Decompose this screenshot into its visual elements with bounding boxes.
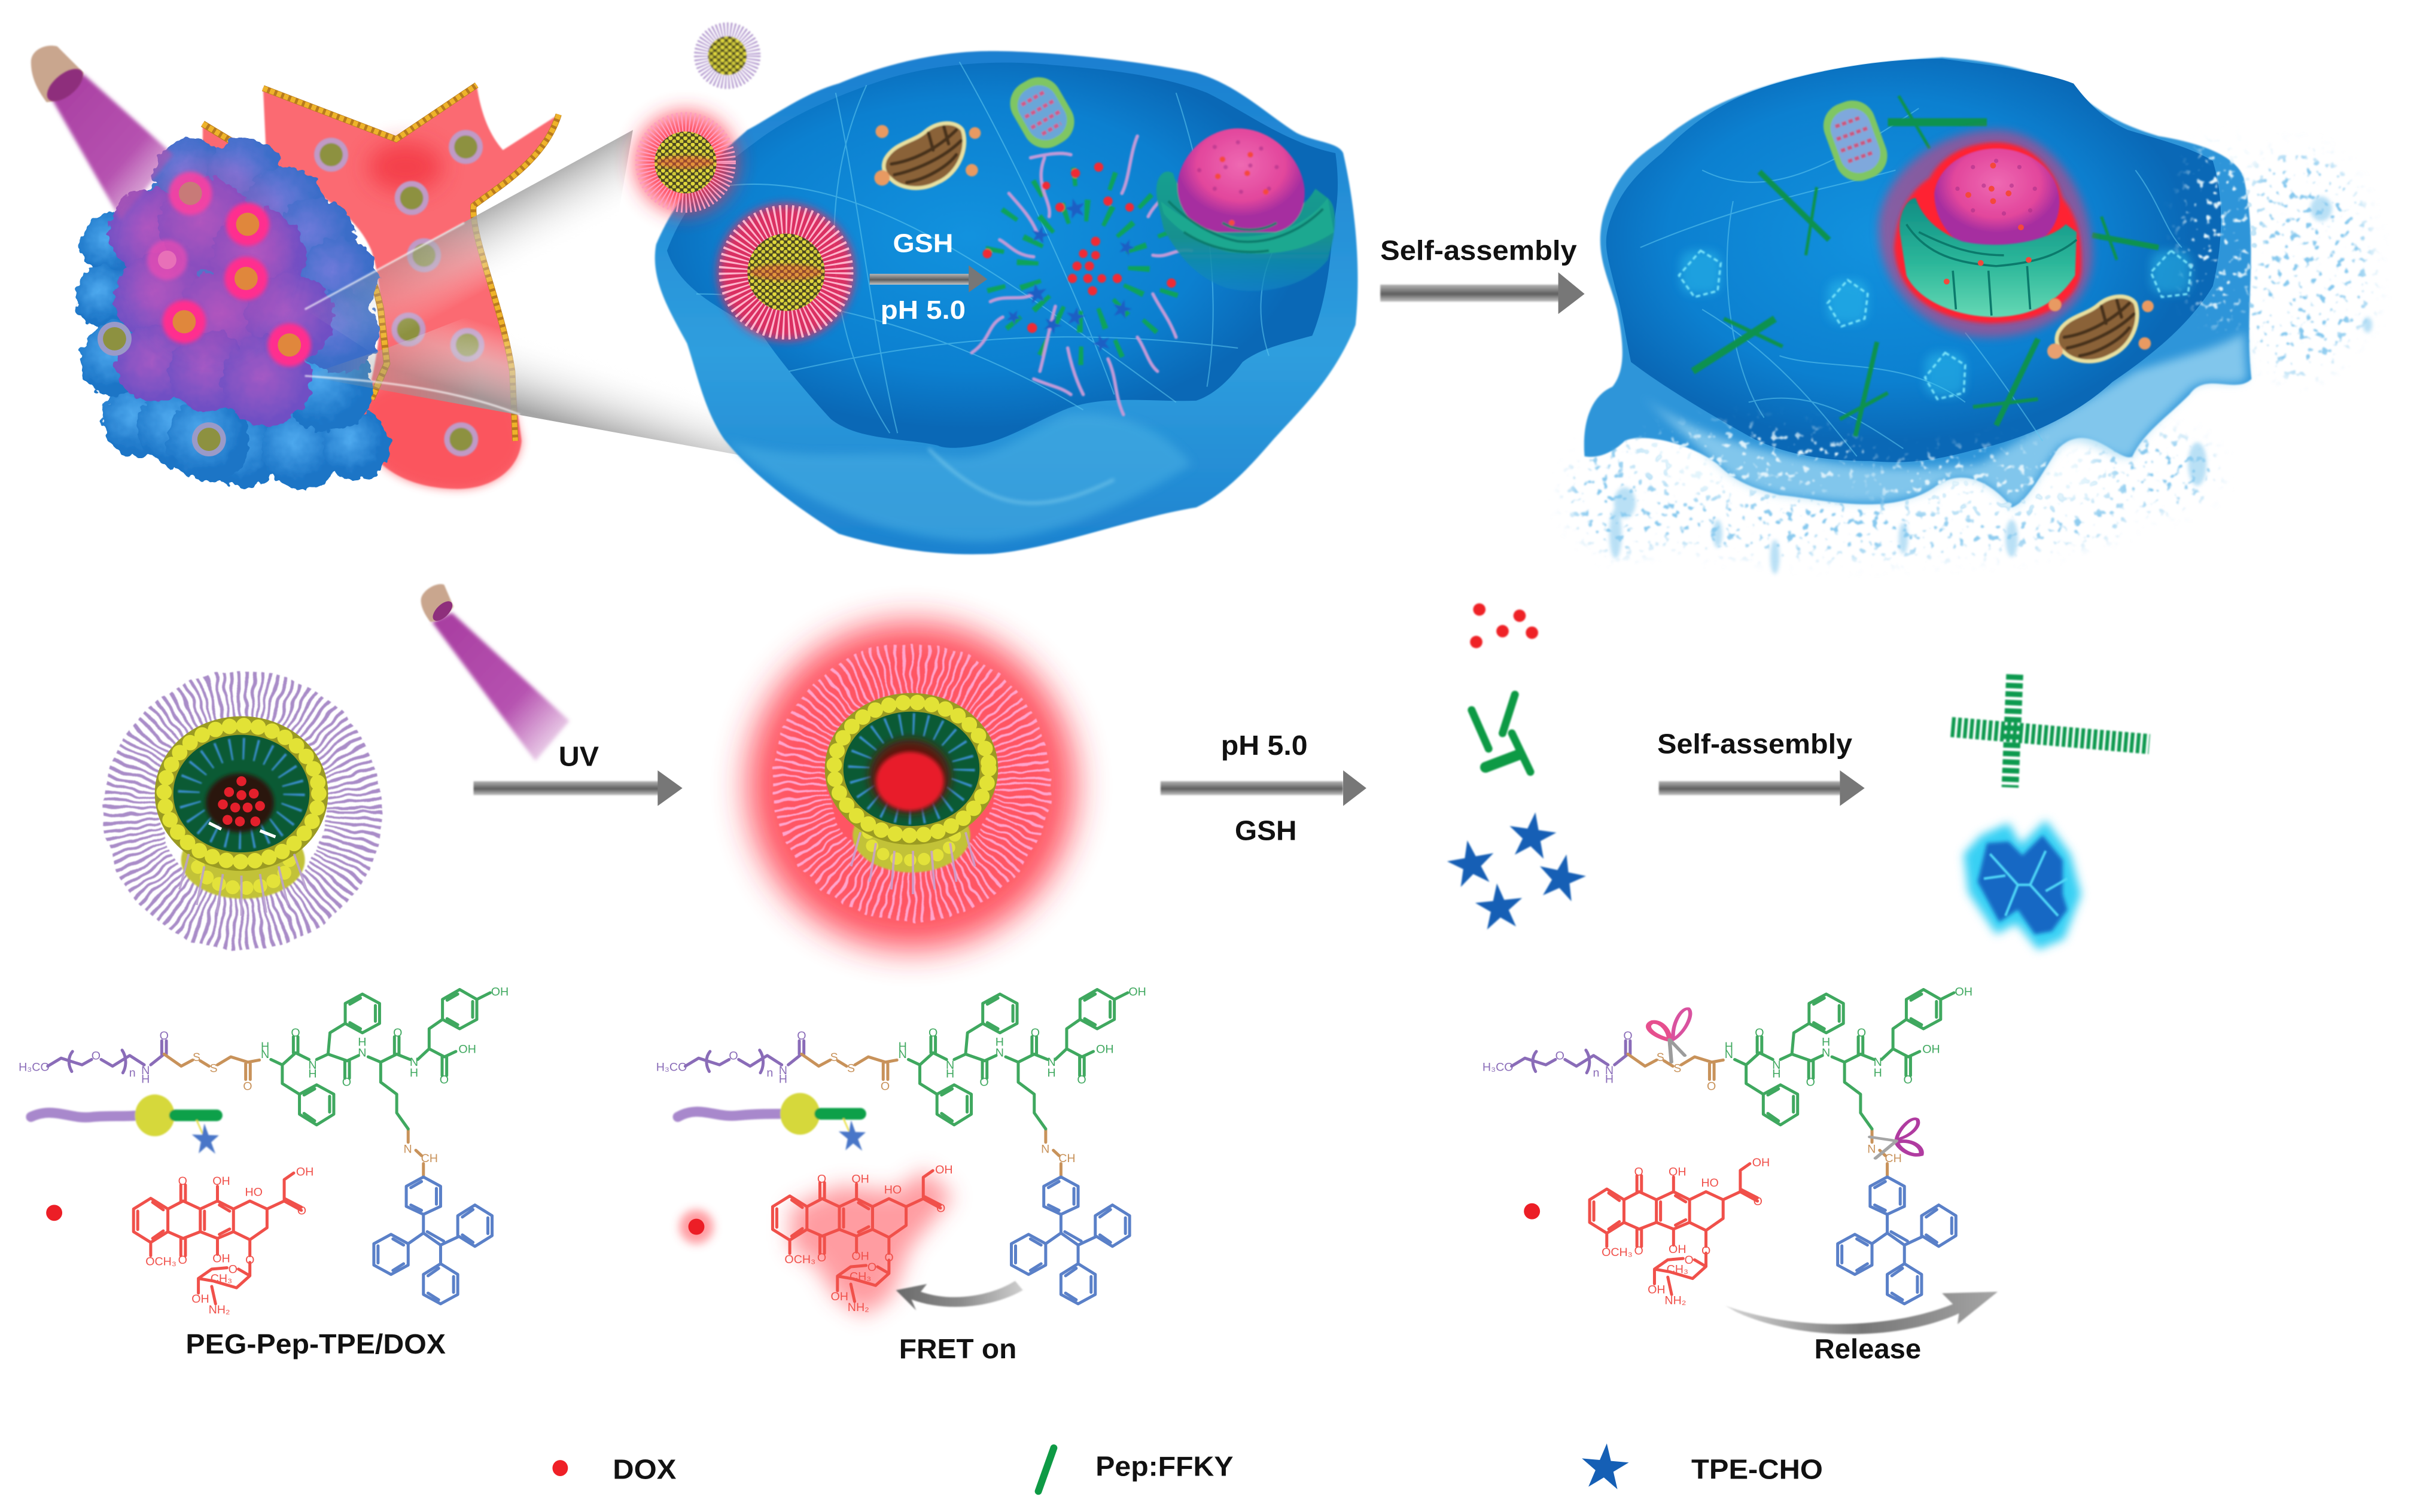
upper molecule: O	[1555, 1050, 1564, 1063]
upper molecule: H	[996, 1035, 1004, 1048]
upper molecule: H	[1725, 1040, 1733, 1053]
DOX segment	[1590, 1156, 1770, 1307]
arrow: lower self-assembly	[1657, 728, 1865, 806]
red glow, ER and nucleus	[1879, 130, 2092, 337]
DOX segment: O	[229, 1263, 238, 1276]
DOX segment: CH₃	[211, 1272, 232, 1285]
DOX segment: NH₂	[209, 1303, 230, 1316]
upper molecule: O	[979, 1076, 989, 1089]
DOX segment: OCH₃	[1602, 1246, 1633, 1259]
arrow: UV: UV	[559, 740, 599, 772]
arrow: top self-assembly: Self-assembly	[1380, 235, 1577, 266]
peptide segment: OH	[458, 1042, 476, 1056]
DOX segment: O	[1701, 1245, 1710, 1258]
peptide segment: H	[308, 1067, 317, 1080]
released peptide rods	[1472, 694, 1530, 772]
upper molecule: O	[1707, 1080, 1716, 1093]
arrow: top self-assembly	[1380, 235, 1585, 314]
upper molecule: H	[899, 1040, 907, 1053]
peptide segment: N	[410, 1056, 418, 1069]
upper molecule: H	[1874, 1066, 1882, 1080]
organelle: mitochondrion	[1817, 94, 1894, 188]
upper molecule: S	[847, 1062, 855, 1075]
upper molecule: S	[1657, 1051, 1664, 1064]
upper molecule: H₃CO	[656, 1061, 687, 1074]
upper molecule: H	[946, 1067, 954, 1080]
DOX with red glow: OH	[830, 1290, 848, 1303]
arrow: UV	[474, 740, 683, 806]
upper molecule: N	[1725, 1048, 1733, 1061]
GSH pH arrow	[870, 229, 987, 325]
DOX with red glow: O	[817, 1251, 826, 1264]
legend: TPE-CHO: TPE-CHO	[1691, 1454, 1823, 1485]
organelle: ER and nucleus	[1156, 129, 1335, 291]
PEG segment: N	[141, 1064, 150, 1077]
DOX segment: OH	[1669, 1166, 1687, 1179]
DOX with red glow: OH	[935, 1163, 953, 1176]
peptide segment	[261, 985, 509, 1129]
blue glowing aggregates	[1679, 251, 2191, 399]
DOX segment: O	[1754, 1195, 1762, 1208]
upper molecule: N	[1041, 1143, 1049, 1156]
icon: scissors on imine	[1870, 1119, 1922, 1159]
curved arrow: Release	[1725, 1292, 1998, 1334]
DOX with red glow: OCH₃	[784, 1253, 815, 1266]
panel: tumour	[31, 45, 390, 489]
peptide segment: N	[358, 1047, 366, 1060]
DOX with red glow: O	[936, 1202, 945, 1215]
upper molecule: OH	[1922, 1042, 1940, 1056]
upper molecule	[1483, 985, 1972, 1304]
peptide segment: OH	[491, 985, 509, 998]
legend: TPE-CHO	[1579, 1441, 1823, 1490]
upper molecule: O	[1031, 1026, 1040, 1040]
disulfide linker: S	[209, 1062, 218, 1075]
disulfide linker: S	[193, 1051, 200, 1064]
DOX segment: O	[178, 1254, 187, 1267]
upper molecule: CH	[1058, 1152, 1076, 1165]
disulfide linker: O	[243, 1080, 252, 1093]
nanoparticles in vessel	[314, 130, 485, 456]
structure: Release	[1483, 985, 1998, 1364]
structure: FRET on	[656, 985, 1146, 1364]
DOX with red glow: OH	[851, 1250, 869, 1263]
DOX with red glow: O	[817, 1172, 826, 1185]
GSH pH arrow: GSH	[893, 229, 953, 258]
peptide segment: N	[261, 1048, 269, 1061]
DOX segment: O	[245, 1254, 254, 1267]
DOX with red glow: HO	[884, 1183, 902, 1196]
curved arrow: FRET	[896, 1281, 1023, 1310]
upper molecule: S	[1673, 1062, 1681, 1075]
released TPE stars	[1444, 809, 1590, 931]
legend: Pep:FFKY: Pep:FFKY	[1095, 1450, 1233, 1481]
DOX segment: OH	[1669, 1243, 1687, 1256]
peptide segment: O	[291, 1026, 300, 1040]
disulfide linker	[164, 1051, 438, 1176]
green fibres	[1693, 96, 2159, 436]
DOX dot with glow	[680, 1210, 713, 1244]
DOX dot	[46, 1205, 62, 1221]
DOX dot	[1524, 1203, 1540, 1220]
upper molecule: OH	[1955, 985, 1972, 998]
disulfide linker: CH	[421, 1152, 438, 1165]
upper molecule: OH	[1096, 1042, 1114, 1056]
upper molecule: N	[1605, 1064, 1614, 1077]
upper molecule: N	[1874, 1056, 1882, 1069]
label: FRET on: FRET on	[899, 1333, 1016, 1364]
PEG segment: H₃CO	[19, 1061, 50, 1074]
DOX segment: O	[1634, 1245, 1643, 1258]
disulfide linker: N	[404, 1143, 412, 1156]
DOX segment: OH	[212, 1175, 230, 1188]
DOX with red glow: NH₂	[848, 1301, 869, 1314]
upper molecule: H	[1822, 1035, 1830, 1048]
legend	[552, 1441, 1823, 1491]
splash over cell wall	[1625, 139, 2258, 517]
upper molecule: OH	[1128, 985, 1146, 998]
peptide segment: N	[308, 1059, 317, 1072]
PEG segment: O	[160, 1029, 169, 1042]
particle: inside cell	[718, 204, 854, 340]
panel: cell with nanoparticle disassembly	[636, 29, 1357, 554]
schematic monomer	[678, 1093, 871, 1156]
upper molecule: H₃CO	[1483, 1061, 1514, 1074]
label: PEG-Pep-TPE/DOX: PEG-Pep-TPE/DOX	[185, 1328, 446, 1359]
legend: DOX	[552, 1454, 676, 1485]
light source: lamp	[31, 45, 173, 220]
micelle 1	[132, 699, 354, 922]
DOX with red glow: CH₃	[850, 1270, 871, 1283]
upper molecule: O	[1857, 1026, 1866, 1040]
DOX segment: O	[1634, 1166, 1643, 1179]
TPE segment	[374, 1177, 492, 1304]
legend: DOX: DOX	[613, 1454, 676, 1485]
upper molecule: O	[797, 1029, 806, 1042]
zoom cones from tumour to cell	[305, 130, 755, 458]
upper molecule: N	[1772, 1059, 1780, 1072]
panel: blood vessel	[203, 85, 559, 489]
upper molecule: N	[946, 1059, 954, 1072]
DOX segment: OH	[1752, 1156, 1770, 1169]
burst of released components	[972, 136, 1196, 414]
blue glowing aggregate	[1964, 820, 2081, 950]
striped fibre cross	[1952, 675, 2150, 788]
DOX segment: O	[297, 1204, 306, 1217]
PEG segment: O	[92, 1050, 101, 1063]
DOX segment: CH₃	[1667, 1263, 1688, 1276]
DOX with red glow	[772, 1163, 953, 1316]
particle: purple PEG-shielded	[701, 29, 754, 82]
peptide segment: H	[358, 1035, 366, 1048]
upper molecule: O	[729, 1050, 738, 1063]
splash specks	[1569, 151, 2371, 556]
DOX with red glow: OH	[851, 1172, 869, 1185]
structure: PEG-Pep-TPE/DOX	[19, 985, 509, 1359]
upper molecule: n	[1593, 1066, 1599, 1080]
DOX segment: OH	[212, 1252, 230, 1266]
DOX segment: HO	[245, 1185, 263, 1199]
DOX with red glow: O	[867, 1261, 876, 1274]
glowing particles on tumour	[98, 172, 311, 456]
organelle: golgi	[2047, 297, 2154, 361]
upper molecule: N	[1822, 1047, 1830, 1060]
DOX segment: OH	[191, 1292, 209, 1306]
peptide segment: H	[410, 1066, 418, 1080]
upper molecule	[656, 985, 1146, 1304]
DOX segment: HO	[1701, 1176, 1719, 1190]
GSH pH arrow: pH 5.0	[881, 295, 966, 325]
micelle 2 with red glow	[747, 622, 1076, 950]
upper molecule: N	[779, 1064, 787, 1077]
PEG segment	[19, 1029, 169, 1086]
upper molecule: S	[830, 1051, 838, 1064]
schematic monomer	[31, 1095, 224, 1159]
DOX segment: O	[1685, 1254, 1694, 1267]
upper molecule: O	[881, 1080, 890, 1093]
upper molecule: N	[1047, 1056, 1056, 1069]
DOX segment: OH	[296, 1166, 313, 1179]
arrow: pH 5.0 GSH: GSH	[1235, 815, 1297, 846]
DOX segment	[133, 1166, 313, 1316]
organelle: mitochondrion	[1001, 69, 1083, 157]
upper molecule: O	[1077, 1074, 1086, 1087]
arrow: pH 5.0 GSH: pH 5.0	[1221, 730, 1308, 761]
peptide segment: O	[440, 1074, 449, 1087]
particle: red glowing entering cell	[636, 113, 735, 212]
panel: cell after self-assembly	[1569, 57, 2372, 574]
upper molecule: H	[1772, 1067, 1780, 1080]
arrow: lower self-assembly: Self-assembly	[1657, 728, 1852, 760]
upper molecule: H	[1047, 1066, 1056, 1080]
DOX segment: OH	[1648, 1283, 1666, 1296]
upper molecule: O	[1755, 1026, 1764, 1040]
upper molecule: O	[1623, 1029, 1633, 1042]
upper molecule: n	[766, 1066, 773, 1080]
lamp and beam: UV	[421, 584, 570, 761]
upper molecule: N	[996, 1047, 1004, 1060]
icon: scissors on disulfide	[1648, 1008, 1690, 1062]
DOX segment: OCH₃	[145, 1255, 176, 1269]
arrow: pH 5.0 GSH	[1161, 730, 1366, 846]
upper molecule: H	[1605, 1073, 1614, 1086]
legend: Pep:FFKY	[1039, 1448, 1233, 1491]
label: Release: Release	[1815, 1333, 1921, 1364]
peptide segment: O	[342, 1076, 351, 1089]
upper molecule: O	[929, 1026, 937, 1040]
DOX segment: NH₂	[1664, 1294, 1686, 1307]
peptide segment: H	[261, 1040, 269, 1053]
PEG segment: H	[141, 1073, 150, 1086]
organelle: golgi	[874, 123, 981, 188]
peptide segment: O	[393, 1026, 402, 1040]
released DOX dots	[1470, 603, 1538, 648]
DOX segment: O	[178, 1175, 187, 1188]
PEG segment: n	[129, 1066, 136, 1080]
upper molecule: O	[1904, 1074, 1913, 1087]
upper molecule: CH	[1885, 1152, 1902, 1165]
upper molecule: N	[899, 1048, 907, 1061]
splash drips	[1609, 196, 2372, 574]
upper molecule: H	[779, 1073, 787, 1086]
DOX with red glow: O	[884, 1251, 894, 1264]
upper molecule: N	[1867, 1143, 1876, 1156]
upper molecule: O	[1806, 1076, 1815, 1089]
